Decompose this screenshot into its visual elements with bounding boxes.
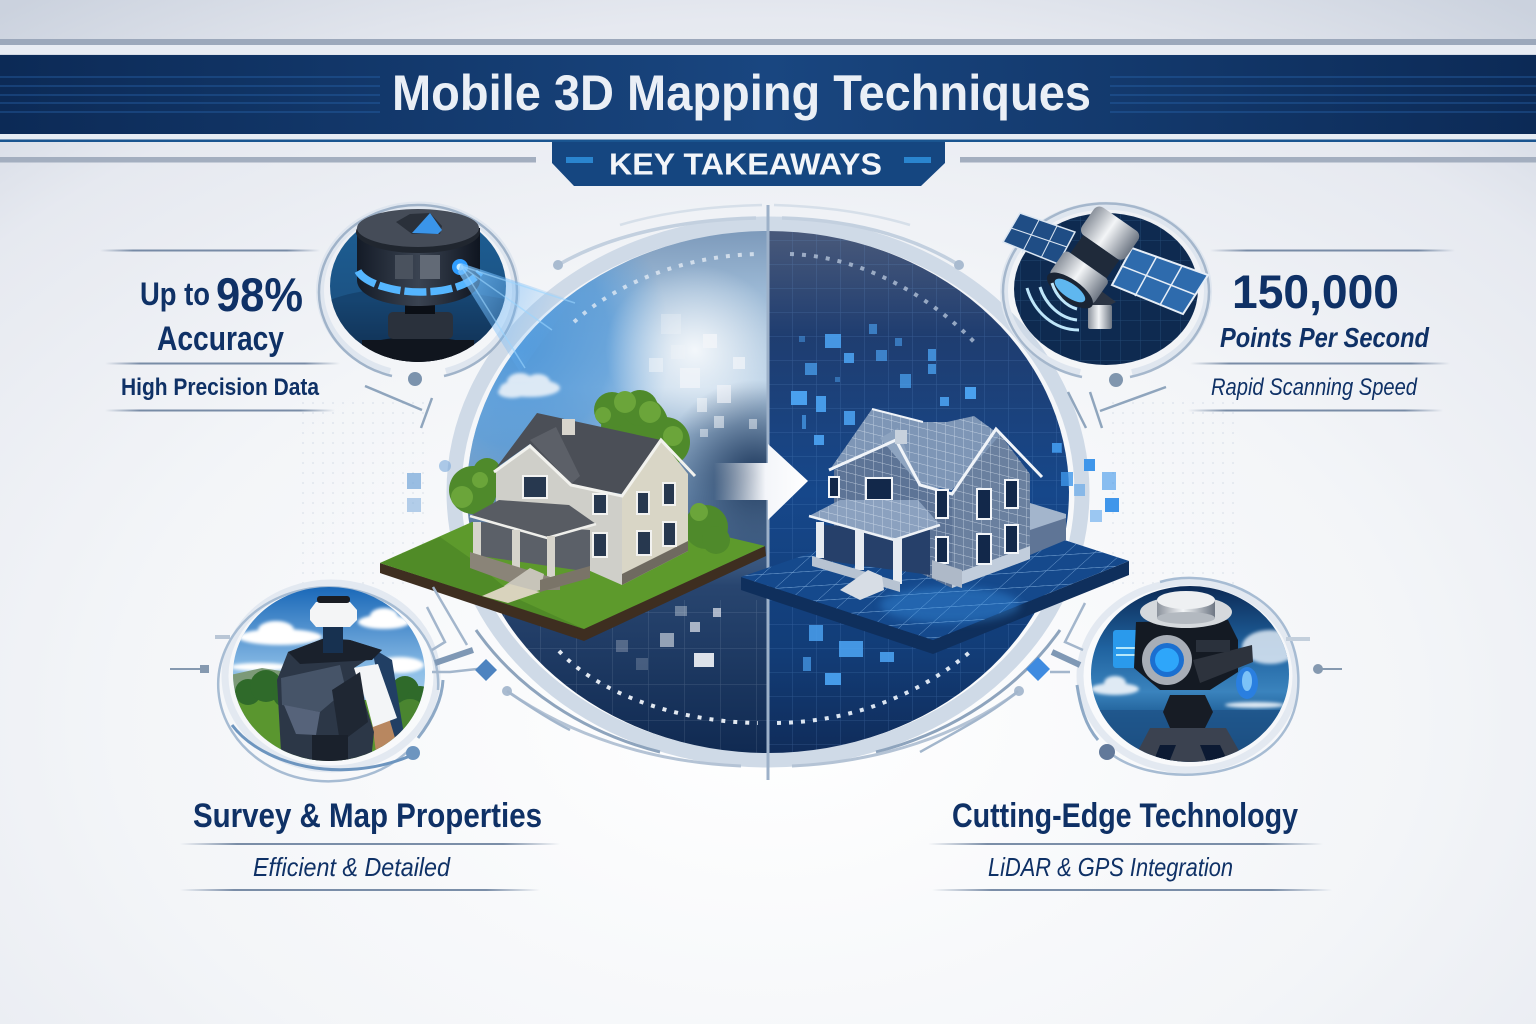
text: survey and map: Survey & Map Properties (193, 797, 542, 835)
roofs (496, 413, 661, 494)
data squares fading (616, 314, 757, 670)
text: accuracy stat: High Precision Data (121, 374, 320, 401)
halftone dots left (300, 400, 430, 590)
trace (1068, 387, 1166, 428)
dome (1140, 600, 1232, 628)
edge data squares (407, 443, 1119, 522)
strap (374, 652, 403, 738)
text: accuracy stat: Up to (140, 276, 210, 312)
connector dot (1099, 744, 1115, 760)
text: cutting-edge technology: Cutting-Edge Technology (952, 797, 1298, 835)
text: survey and map (180, 797, 560, 891)
icon: satellite (1003, 204, 1208, 329)
canister (1113, 630, 1136, 668)
sensor mast (323, 627, 343, 653)
signal waves (1027, 283, 1079, 330)
text: accuracy stat (100, 250, 340, 412)
ring (319, 205, 517, 376)
left half: photo side (468, 231, 1069, 753)
laser beam (458, 263, 572, 372)
landscape (233, 668, 280, 720)
windows (523, 476, 676, 557)
connector dots (502, 260, 1024, 696)
panel: LiDAR sensor medallion (319, 205, 575, 428)
ring (1003, 203, 1209, 377)
text: scan speed stat (1188, 250, 1455, 412)
data squares bright (791, 324, 1061, 685)
backpack (277, 638, 382, 770)
icon: digital wireframe house on grid (741, 409, 1129, 654)
connector dot (408, 372, 422, 386)
title banner (0, 39, 1536, 162)
traces (920, 603, 1085, 752)
text: accuracy stat: 98% (216, 268, 303, 321)
diamond (475, 659, 497, 681)
diamond (1026, 657, 1050, 681)
text: scan speed stat: Points Per Second (1220, 322, 1430, 353)
connector dot (406, 746, 420, 760)
ring (1077, 578, 1298, 775)
arm (372, 720, 400, 750)
center divider (766, 205, 770, 780)
text: accuracy stat: Accuracy (157, 320, 284, 358)
tripod (1138, 728, 1239, 762)
cloud (498, 373, 560, 398)
arrow (714, 444, 808, 520)
platform (741, 561, 1129, 654)
icon: LiDAR scanner (332, 292, 505, 362)
clouds (230, 608, 424, 673)
text: cutting-edge technology (928, 797, 1332, 891)
shirt (353, 664, 397, 727)
trees (449, 390, 730, 554)
key takeaways label: KEY TAKEAWAYS (609, 146, 882, 182)
porch (822, 525, 930, 575)
roofs (831, 409, 1000, 490)
clouds (1091, 630, 1298, 708)
blue lens (1236, 667, 1258, 699)
side marker (170, 668, 200, 670)
ground slab (380, 546, 766, 641)
text: scan speed stat: Rapid Scanning Speed (1211, 374, 1418, 401)
title text: Mobile 3D Mapping Techniques (392, 65, 1091, 121)
outer ring (454, 205, 1082, 766)
connector dot (1109, 373, 1123, 387)
trace (365, 386, 432, 428)
walls (496, 446, 622, 585)
halftone dots right (1110, 400, 1240, 590)
lens (1142, 635, 1192, 685)
panel: tripod scanner medallion (920, 578, 1342, 775)
ring (218, 583, 443, 781)
panel: backpack scanner medallion (170, 583, 570, 781)
text: scan speed stat: 150,000 (1232, 265, 1399, 318)
body (1134, 620, 1238, 690)
porch (480, 522, 590, 572)
text: survey and map: Efficient & Detailed (253, 852, 451, 882)
icon: real house on lawn (380, 390, 766, 641)
text: cutting-edge technology: LiDAR & GPS Integration (988, 852, 1233, 882)
walls (1030, 514, 1066, 555)
panel: satellite medallion (1003, 203, 1209, 428)
right half: digital side (770, 231, 1069, 753)
traces (427, 587, 570, 730)
dotted arc left (574, 254, 760, 322)
subtitle ribbon (552, 142, 945, 186)
side marker (1320, 668, 1342, 670)
central comparison circle (446, 204, 1090, 780)
windows (829, 477, 1018, 564)
